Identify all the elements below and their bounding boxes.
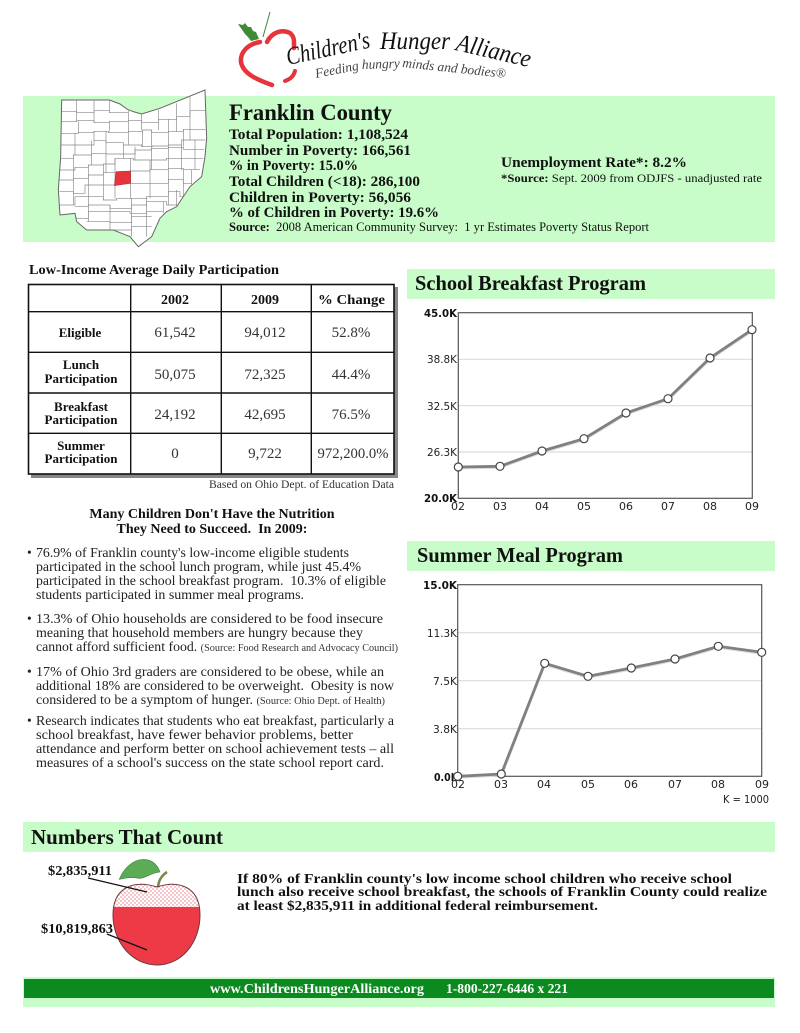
line chart: summer meal: 3.8K bbox=[433, 723, 458, 736]
logo wordmark: Hunger bbox=[379, 28, 450, 55]
line chart: school breakfast bbox=[424, 307, 759, 513]
heading: School Breakfast Program: School Breakfast Program bbox=[415, 271, 646, 295]
heading: nutrition bbox=[89, 507, 335, 537]
county statistics bbox=[229, 127, 439, 221]
bullet: participation: participated in the school lunch program, while just 45.4% bbox=[36, 559, 361, 574]
heading: Franklin County: Franklin County bbox=[229, 100, 392, 125]
logo tagline: Feeding bbox=[313, 58, 360, 81]
line chart: school breakfast: 26.3K bbox=[427, 446, 458, 459]
logo tagline: hungry bbox=[362, 56, 400, 72]
icon: apple proportion chart: $10,819,863 bbox=[41, 922, 113, 937]
heading: Numbers That Count bbox=[23, 822, 775, 852]
table: low-income participation: Eligible bbox=[59, 325, 102, 340]
bullet: participation: 76.9% of Franklin county's low-income eligible students bbox=[36, 545, 349, 560]
table: low-income participation: Breakfast bbox=[54, 399, 109, 414]
line chart: summer meal bbox=[423, 579, 769, 806]
line chart: school breakfast: 45.0K bbox=[424, 307, 457, 320]
line chart: summer meal: 06 bbox=[624, 778, 638, 791]
line chart: school breakfast: 08 bbox=[703, 500, 717, 513]
line chart: school breakfast: 02 bbox=[451, 500, 465, 513]
heading: nutrition: They Need to Succeed. In 2009: bbox=[117, 522, 307, 537]
line chart: school breakfast: 03 bbox=[493, 500, 507, 513]
unemployment source: *Source: Sept. 2009 from ODJFS - unadjusted rate bbox=[501, 171, 762, 185]
bullet: obesity: 17% of Ohio 3rd graders are considered to be obese, while an bbox=[36, 664, 384, 679]
bullet: food insecurity: 13.3% of Ohio households are considered to be food insecure bbox=[36, 611, 383, 626]
table: low-income participation bbox=[28, 284, 398, 478]
line chart: summer meal: 0.0K bbox=[434, 771, 458, 784]
unemployment rate: Unemployment Rate*: 8.2% bbox=[501, 155, 687, 171]
table: low-income participation: 50,075 bbox=[154, 367, 196, 383]
county statistics: Children in Poverty: 56,056 bbox=[229, 190, 412, 206]
bullet: breakfast research: Research indicates that students who eat breakfast, particularly a bbox=[36, 713, 394, 728]
bullet: obesity: considered to be a symptom of hunger. (Source: Ohio Dept. of Health) bbox=[36, 692, 385, 707]
table: low-income participation: 24,192 bbox=[154, 407, 196, 423]
table: low-income participation: 52.8% bbox=[332, 325, 370, 341]
text block: reimbursement statement bbox=[237, 872, 767, 914]
line chart: summer meal: 05 bbox=[581, 778, 595, 791]
table note: Based on Ohio Dept. of Education Data bbox=[209, 479, 394, 491]
bullet: breakfast research: • bbox=[27, 713, 32, 728]
logo tagline bbox=[313, 55, 507, 81]
panel: county summary bbox=[23, 90, 775, 247]
bullet: participation: students participated in summer meal programs. bbox=[36, 587, 304, 602]
county statistics: Total Children (<18): 286,100 bbox=[229, 174, 420, 190]
table: low-income participation: 72,325 bbox=[244, 367, 286, 383]
bullet: breakfast research: measures of a school's success on the state school report card. bbox=[36, 755, 384, 770]
table: low-income participation: 2009 bbox=[251, 293, 279, 308]
line chart: school breakfast: 38.8K bbox=[427, 353, 458, 366]
bullet: breakfast research: attendance and perform better on school achievement tests – all bbox=[36, 741, 394, 756]
line chart: school breakfast: 07 bbox=[661, 500, 675, 513]
line chart: summer meal: K = 1000 bbox=[723, 793, 769, 806]
line chart: summer meal: 02 bbox=[451, 778, 465, 791]
bullet: participation: • bbox=[27, 545, 32, 560]
text block: reimbursement statement: lunch also receive school breakfast, the schools of Franklin County could realize bbox=[237, 885, 767, 900]
heading: Summer Meal Program: Summer Meal Program bbox=[417, 543, 623, 567]
logo: Children's Hunger Alliance bbox=[238, 12, 534, 85]
heading: nutrition: Many Children Don't Have the Nutrition bbox=[89, 507, 335, 522]
footer bar: www.ChildrensHungerAlliance.org bbox=[210, 981, 424, 996]
heading: School Breakfast Program bbox=[407, 269, 775, 299]
county statistics: Number in Poverty: 166,561 bbox=[229, 143, 411, 159]
text block: bullet points bbox=[27, 545, 398, 770]
bullet: food insecurity bbox=[27, 611, 398, 654]
table: low-income participation: % Change bbox=[318, 293, 385, 308]
table: low-income participation: 972,200.0% bbox=[318, 446, 388, 462]
text block: reimbursement statement: If 80% of Franklin county's low income school children who receive school bbox=[237, 872, 732, 887]
table: low-income participation: 42,695 bbox=[244, 407, 286, 423]
table: low-income participation: Participation bbox=[45, 371, 118, 386]
bullet: participation: participated in the school breakfast program. 10.3% of eligible bbox=[36, 573, 386, 588]
bullet: food insecurity: meaning that household members are hungry because they bbox=[36, 625, 363, 640]
logo wordmark: Children's bbox=[284, 27, 372, 71]
logo wordmark: Alliance bbox=[452, 29, 534, 73]
county statistics: Total Population: 1,108,524 bbox=[229, 127, 409, 143]
table: low-income participation: Participation bbox=[45, 451, 118, 466]
county statistics: % of Children in Poverty: 19.6% bbox=[229, 205, 439, 221]
table: low-income participation: 61,542 bbox=[154, 325, 196, 341]
logo tagline: minds and bodies® bbox=[402, 55, 507, 81]
logo wordmark bbox=[284, 27, 534, 73]
line chart: school breakfast: 05 bbox=[577, 500, 591, 513]
icon: apple proportion chart bbox=[41, 859, 200, 965]
line chart: summer meal: 08 bbox=[711, 778, 725, 791]
bullet: breakfast research: school breakfast, have fewer behavior problems, better bbox=[36, 727, 354, 742]
table: low-income participation: 2002 bbox=[161, 293, 189, 308]
bullet: obesity: additional 18% are considered to be overweight. Obesity is now bbox=[36, 678, 394, 693]
bullet: participation bbox=[27, 545, 386, 602]
line chart: summer meal: 03 bbox=[494, 778, 508, 791]
heading: Summer Meal Program bbox=[407, 541, 775, 571]
map highlight: Franklin County bbox=[114, 171, 131, 186]
line chart: school breakfast: 04 bbox=[535, 500, 549, 513]
bullet: obesity: • bbox=[27, 664, 32, 679]
line chart: school breakfast: 20.0K bbox=[424, 492, 457, 505]
table: low-income participation: 76.5% bbox=[332, 407, 370, 423]
source note: Source: 2008 American Community Survey: 1 yr Estimates Poverty Status Report bbox=[229, 220, 650, 234]
bullet: obesity bbox=[27, 664, 394, 707]
heading: Numbers That Count: Numbers That Count bbox=[31, 825, 223, 849]
table: low-income participation: 9,722 bbox=[248, 446, 282, 462]
bullet: food insecurity: • bbox=[27, 611, 32, 626]
footer bar bbox=[23, 977, 775, 1007]
county statistics: % in Poverty: 15.0% bbox=[229, 158, 358, 174]
table: low-income participation: Participation bbox=[45, 412, 118, 427]
table: low-income participation: 44.4% bbox=[332, 367, 370, 383]
table: low-income participation: Summer bbox=[57, 438, 105, 453]
table: low-income participation: 94,012 bbox=[244, 325, 286, 341]
line chart: summer meal: 04 bbox=[537, 778, 551, 791]
line chart: summer meal: 7.5K bbox=[433, 675, 458, 688]
line chart: summer meal: 15.0K bbox=[423, 579, 457, 592]
icon: apple proportion chart: $2,835,911 bbox=[48, 864, 112, 879]
table: low-income participation: Lunch bbox=[63, 357, 100, 372]
bullet: breakfast research bbox=[27, 713, 394, 770]
table: low-income participation: 0 bbox=[171, 446, 179, 462]
line chart: summer meal: 09 bbox=[755, 778, 769, 791]
icon: logo apple bbox=[238, 12, 295, 85]
line chart: school breakfast: 32.5K bbox=[427, 400, 458, 413]
line chart: summer meal: 07 bbox=[668, 778, 682, 791]
table heading: Low-Income Average Daily Participation bbox=[29, 262, 280, 277]
text block: reimbursement statement: at least $2,835,911 in additional federal reimbursement. bbox=[237, 899, 598, 914]
footer bar: 1-800-227-6446 x 221 bbox=[446, 981, 568, 996]
icon: Ohio county map bbox=[58, 90, 207, 247]
line chart: summer meal: 11.3K bbox=[427, 627, 458, 640]
line chart: school breakfast: 06 bbox=[619, 500, 633, 513]
bullet: food insecurity: cannot afford sufficient food. (Source: Food Research and Advocacy Council) bbox=[36, 639, 398, 654]
line chart: school breakfast: 09 bbox=[745, 500, 759, 513]
